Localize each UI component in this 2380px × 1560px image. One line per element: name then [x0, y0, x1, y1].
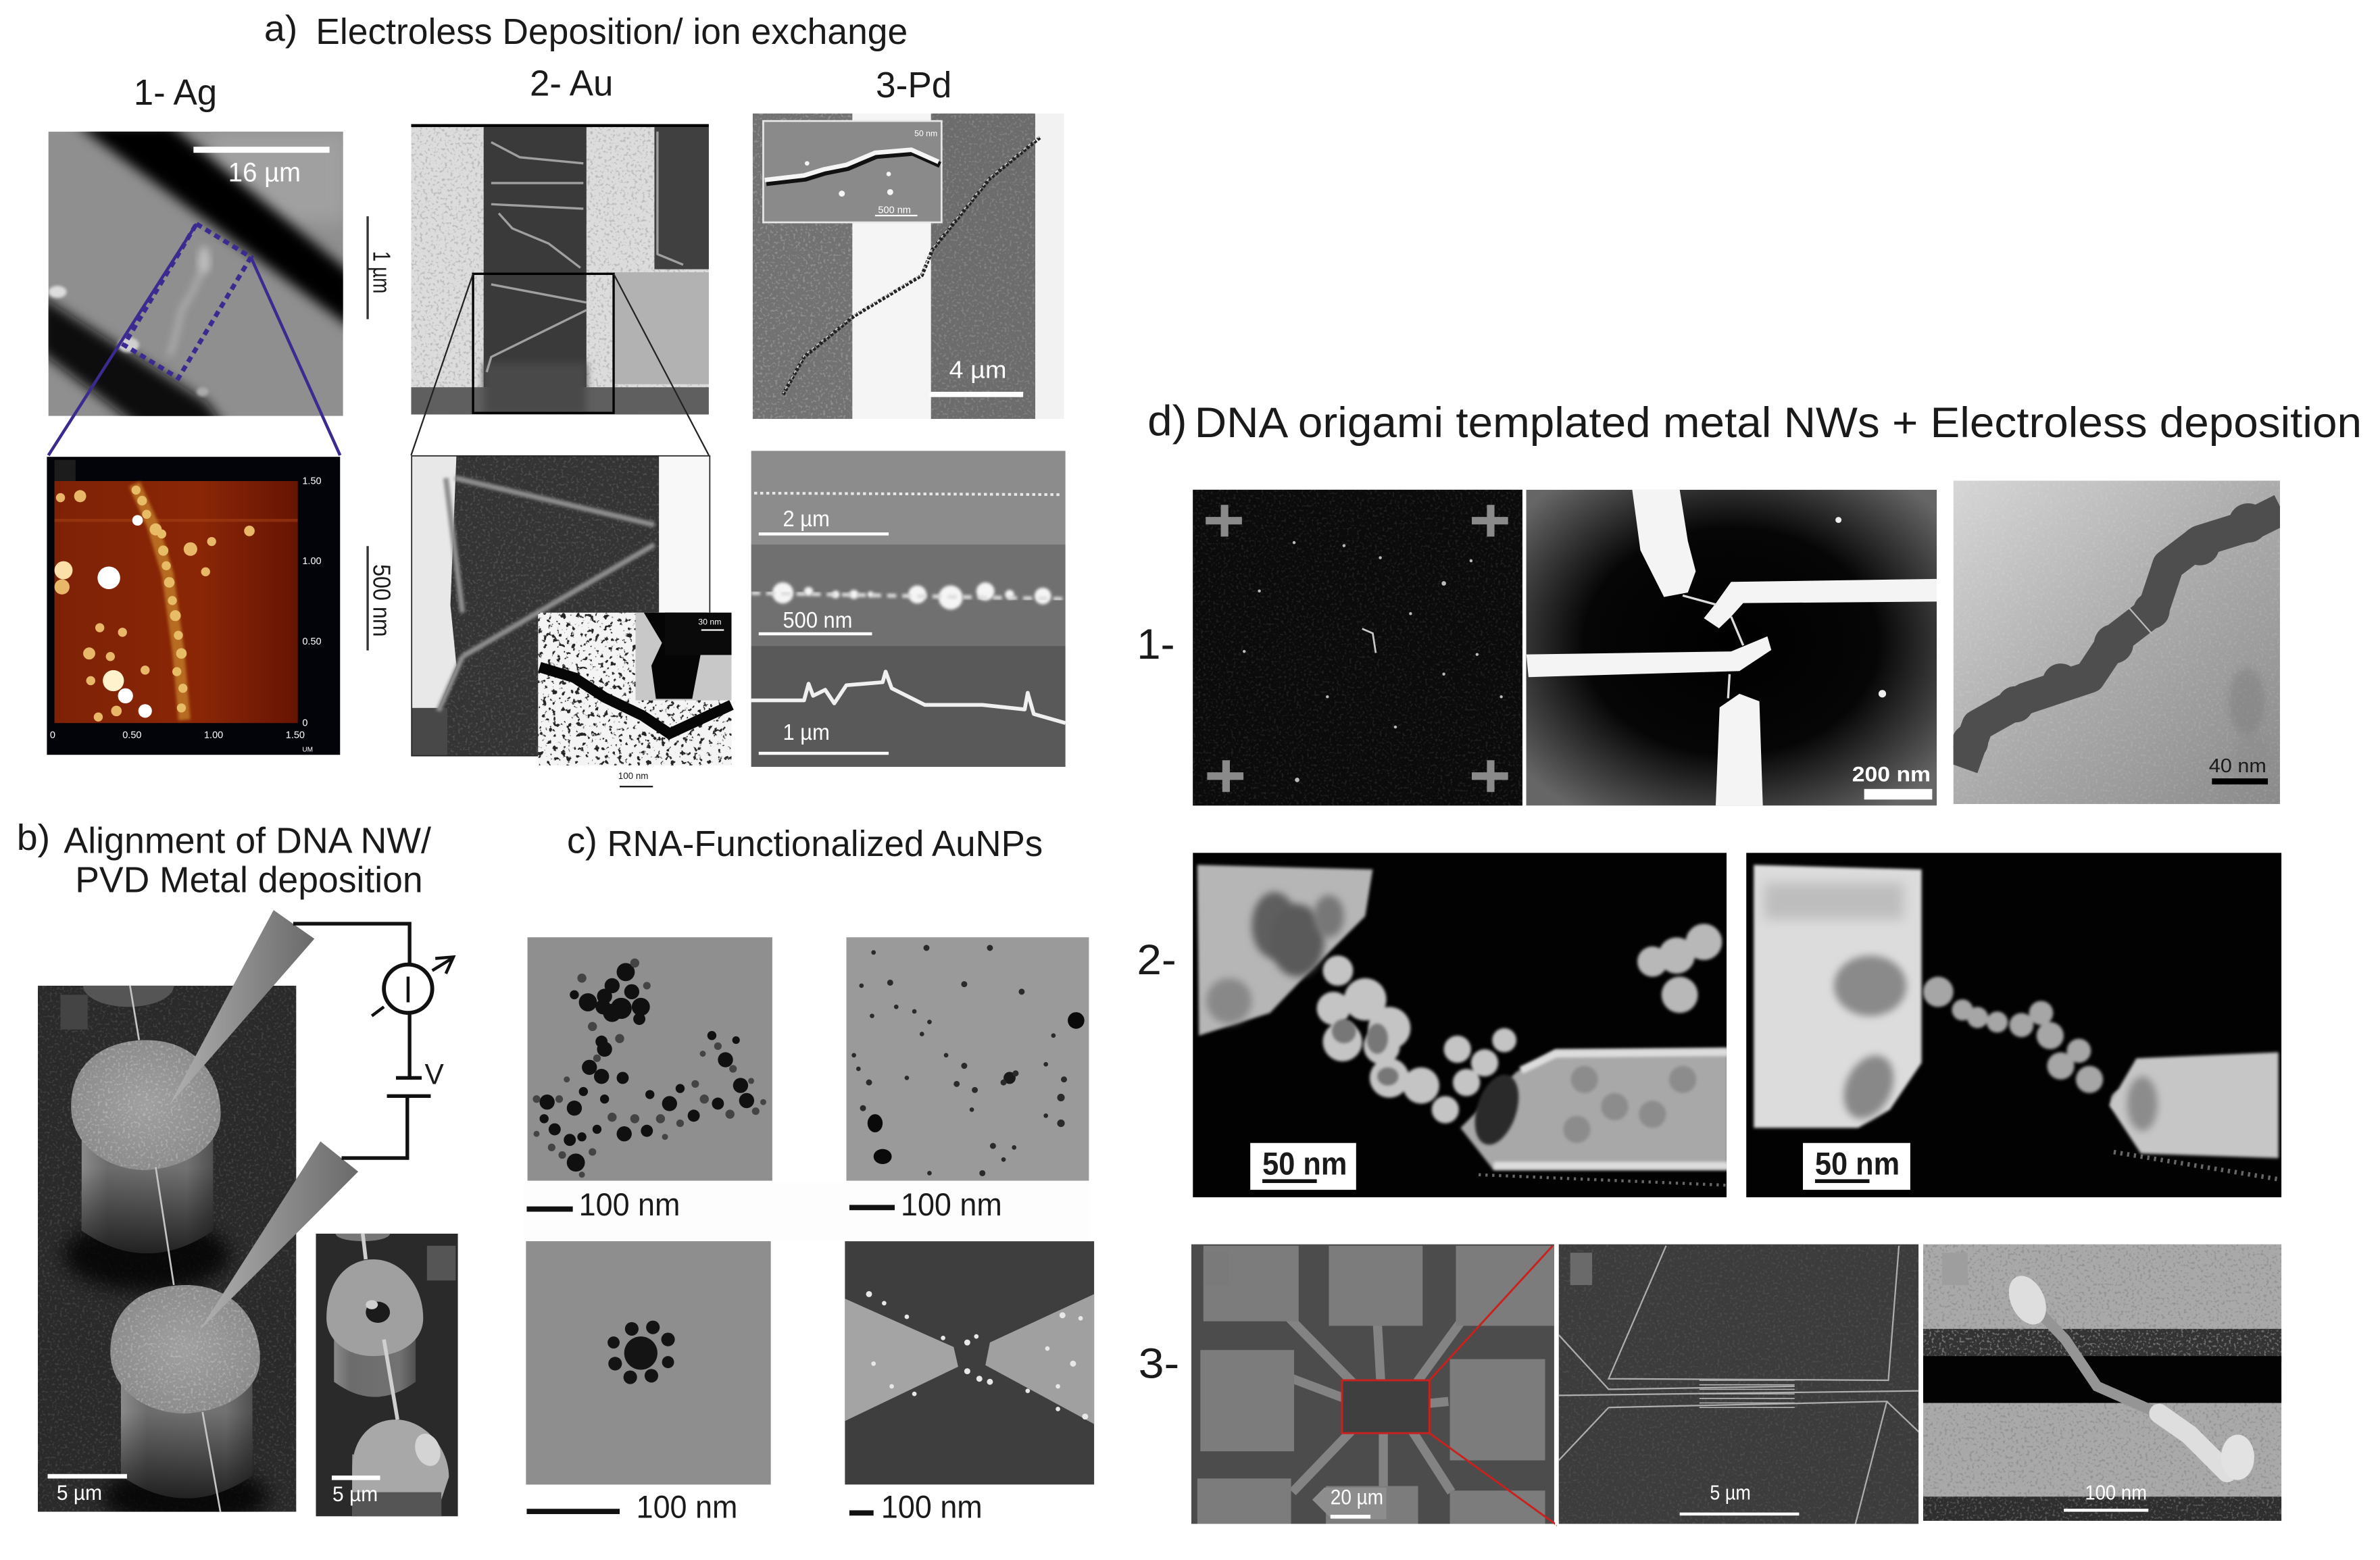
contact pads — [1197, 1246, 1556, 1526]
white divider — [1523, 490, 1527, 805]
TEM inset: 30 nm — [698, 618, 721, 627]
panel: Ag optical micrograph — [49, 131, 343, 416]
strip: 2 µm — [751, 451, 1066, 545]
scale bar — [2212, 778, 2268, 784]
heading: d) DNA origami templated metal NWs + Electroless deposition: DNA origami templated metal NWs + Electroless deposition — [1195, 399, 2362, 447]
scale bar: 1 µm: 1 µm — [368, 251, 395, 293]
heading: b) Alignment of DNA NW / PVD Metal deposition — [17, 817, 431, 901]
upper left electrode — [1197, 865, 1372, 1036]
scale box — [1803, 1143, 1910, 1190]
scale label: 100 nm — [901, 1186, 1002, 1222]
scale label: 5 µm — [332, 1482, 378, 1506]
panel: satellite AuNP structure TEM — [526, 1241, 771, 1525]
section: panels b and c micrographs — [38, 910, 1094, 1527]
scale bar — [929, 392, 1023, 397]
right electrode — [985, 1294, 1094, 1424]
inset scale: 100 nm: 100 nm — [618, 771, 648, 781]
panel: interdigitated electrode SEM — [1559, 1244, 1920, 1526]
scale label: 200 nm — [1852, 763, 1931, 786]
zoom region: purple dashed frame and projection lines — [49, 224, 340, 455]
row label: 2-: 2- — [1137, 936, 1176, 984]
panel: Ag AFM height map — [47, 457, 340, 755]
scale box: 50 nm — [1262, 1146, 1347, 1182]
scale label: 16 µm — [228, 157, 301, 188]
particle chain — [1923, 977, 2132, 1111]
scale bar — [1331, 1515, 1370, 1519]
panel: multi-electrode device overview — [1191, 1244, 1556, 1526]
nanowires — [487, 132, 683, 372]
AFM axis labels: 0.50 — [122, 730, 141, 741]
chain — [1962, 509, 2281, 768]
small nanoparticles — [851, 945, 1067, 1176]
gold particles — [866, 1291, 1088, 1419]
electrodes — [1527, 490, 1937, 807]
section: panel d row 1 micrographs — [1193, 480, 2281, 807]
inset AFM: 50 nm — [914, 128, 937, 139]
AFM axis labels: UM — [302, 747, 313, 754]
AFM axis labels: 1.00 — [204, 730, 223, 741]
scale bar — [849, 1510, 874, 1515]
strip: 500 nm: 500 nm — [783, 608, 852, 633]
AFM axis labels — [50, 476, 322, 754]
black zoom rectangle — [473, 274, 614, 413]
nanowire — [363, 1234, 397, 1419]
panel: Pd wires at three magnifications — [751, 451, 1066, 767]
metal blobs — [2002, 1270, 2054, 1330]
central region — [1343, 1380, 1430, 1433]
particle chain — [1317, 955, 1516, 1124]
icon: ammeter — [372, 957, 453, 1016]
white divider — [1555, 1244, 1558, 1526]
scale bar — [526, 1509, 620, 1514]
scale bar — [193, 147, 330, 153]
isolated particle cluster — [1637, 924, 1722, 1013]
scale bar — [849, 1205, 895, 1210]
scale label: 100 nm — [881, 1489, 983, 1525]
inset AFM: 500 nm — [878, 205, 911, 216]
strip: 500 nm — [751, 545, 1066, 646]
heading: 1- Ag: 1- Ag — [134, 72, 217, 113]
leads — [1289, 1318, 1464, 1492]
panel: AuNP aggregate TEM — [526, 937, 772, 1222]
panel: Au wires zoomed with TEM inset — [411, 455, 731, 765]
scale label: 40 nm — [2209, 755, 2266, 777]
AFM axis labels: 0 — [302, 718, 307, 729]
scale bar — [1680, 1513, 1799, 1515]
panel: Au wires on electrodes — [411, 124, 710, 414]
heading: c) RNA-Functionalized AuNPs: c) — [567, 820, 597, 861]
core and satellites — [608, 1321, 675, 1384]
zoom region: red rectangle and projection lines — [1342, 1246, 1557, 1526]
strip: 2 µm: 2 µm — [783, 507, 830, 532]
AFM axis labels: 0.50 — [302, 636, 322, 647]
gap in chain — [2129, 607, 2152, 633]
row label: 1-: 1- — [1137, 621, 1175, 668]
heading: c) RNA-Functionalized AuNPs: RNA-Functionalized AuNPs — [607, 824, 1043, 864]
scale label: 20 µm — [1331, 1485, 1383, 1509]
alignment crosses — [1206, 505, 1508, 792]
scale label: 5 µm — [1710, 1482, 1751, 1505]
scale box — [1250, 1143, 1356, 1190]
electrode lines — [1559, 1246, 1920, 1526]
scale label: 4 µm — [949, 357, 1007, 384]
Pd wire — [783, 138, 1040, 395]
heading: b) Alignment of DNA NW / PVD Metal deposition: b) — [17, 817, 50, 858]
panel: gold particle chain junction B — [1746, 853, 2281, 1197]
gold nanoparticle chain — [132, 484, 187, 720]
row label: 3-: 3- — [1139, 1340, 1179, 1387]
lower pillar — [352, 1419, 449, 1516]
particles — [1835, 517, 1841, 523]
scale bar — [2064, 1509, 2148, 1512]
icon: measurement probe tips — [170, 910, 358, 1330]
panel: gold particle chain junction A — [1193, 853, 1728, 1197]
panel: metallized origami chain TEM — [1952, 480, 2281, 804]
scale bar: 500 nm: 500 nm — [368, 564, 395, 637]
scale box: 50 nm — [1815, 1146, 1900, 1182]
panel: DNA nanowire after electrical damage SEM — [316, 1226, 458, 1516]
inset scale: 100 nm — [618, 771, 653, 787]
heading: b) Alignment of DNA NW / PVD Metal deposition: Alignment of DNA NW/ — [64, 820, 431, 861]
left electrode — [845, 1299, 958, 1421]
heading: b) Alignment of DNA NW / PVD Metal deposition: PVD Metal deposition — [75, 860, 423, 901]
circuit: ammeter and voltage source — [293, 924, 453, 1158]
AFM axis labels: 1.00 — [302, 556, 322, 567]
panel: AuNPs at nanogap SEM — [845, 1241, 1094, 1525]
heading: d) DNA origami templated metal NWs + Electroless deposition: d) — [1147, 398, 1187, 445]
scale patch — [1312, 1488, 1387, 1519]
section: panel d rows 2 and 3 micrographs — [1191, 853, 2281, 1526]
scale bar: 1 µm — [366, 216, 395, 319]
caption background strip for panel c — [523, 1182, 1090, 1240]
left electrode — [1754, 865, 1922, 1128]
panel: dispersed AuNPs TEM — [846, 937, 1089, 1222]
pillar 2 — [103, 1285, 269, 1527]
panel: nanowire between four electrodes — [1525, 490, 1937, 807]
AFM axis labels: 1.50 — [302, 476, 322, 486]
bridging nanowire — [1683, 595, 1743, 699]
central wire and debris — [1362, 629, 1376, 653]
pillar 1 — [64, 1040, 230, 1291]
voltage label: V — [424, 1059, 444, 1090]
nanowire — [2033, 1306, 2159, 1413]
panel: nanowire across gap SEM — [1923, 1244, 2281, 1521]
right electrode — [2109, 1053, 2279, 1179]
scale bar — [526, 1207, 573, 1211]
heading: a) Electroless Deposition / ion exchange: Electroless Deposition/ ion exchange — [316, 11, 908, 52]
panel: wires on marker grid — [1193, 490, 1522, 805]
scale label: 5 µm — [57, 1481, 102, 1505]
AFM axis labels: 0 — [50, 730, 55, 741]
comb fingers — [1700, 1380, 1795, 1407]
nanowire segments — [130, 986, 221, 1513]
TEM inset — [538, 613, 731, 765]
upper pillar — [326, 1259, 423, 1397]
inset AFM — [763, 121, 941, 222]
scale bar — [47, 1474, 127, 1478]
strip: 1 µm: 1 µm — [783, 720, 830, 745]
scale bar — [332, 1476, 380, 1480]
section: panel a micrographs — [39, 114, 1066, 787]
icon: battery plates — [387, 1078, 430, 1096]
scale bar — [1864, 789, 1932, 799]
scattered gold particles — [55, 490, 255, 722]
panel: DNA nanowire bridging pillars SEM — [38, 965, 296, 1527]
strip: 1 µm — [751, 646, 1066, 767]
panel: Pd nanowire on electrodes — [753, 114, 1064, 419]
nanoparticle aggregate — [539, 963, 754, 1172]
zoom lines: Au — [411, 274, 709, 455]
AFM axis labels: 1.50 — [286, 730, 305, 741]
scale label: 100 nm — [637, 1489, 737, 1525]
scale label: 100 nm — [2085, 1482, 2147, 1505]
heading: a) Electroless Deposition / ion exchange: a) — [264, 9, 297, 49]
heading: 2- Au: 2- Au — [530, 64, 613, 104]
heading: 3-Pd: 3-Pd — [876, 65, 951, 105]
lower right electrode — [1460, 1048, 1728, 1185]
scale label: 100 nm — [579, 1186, 680, 1222]
